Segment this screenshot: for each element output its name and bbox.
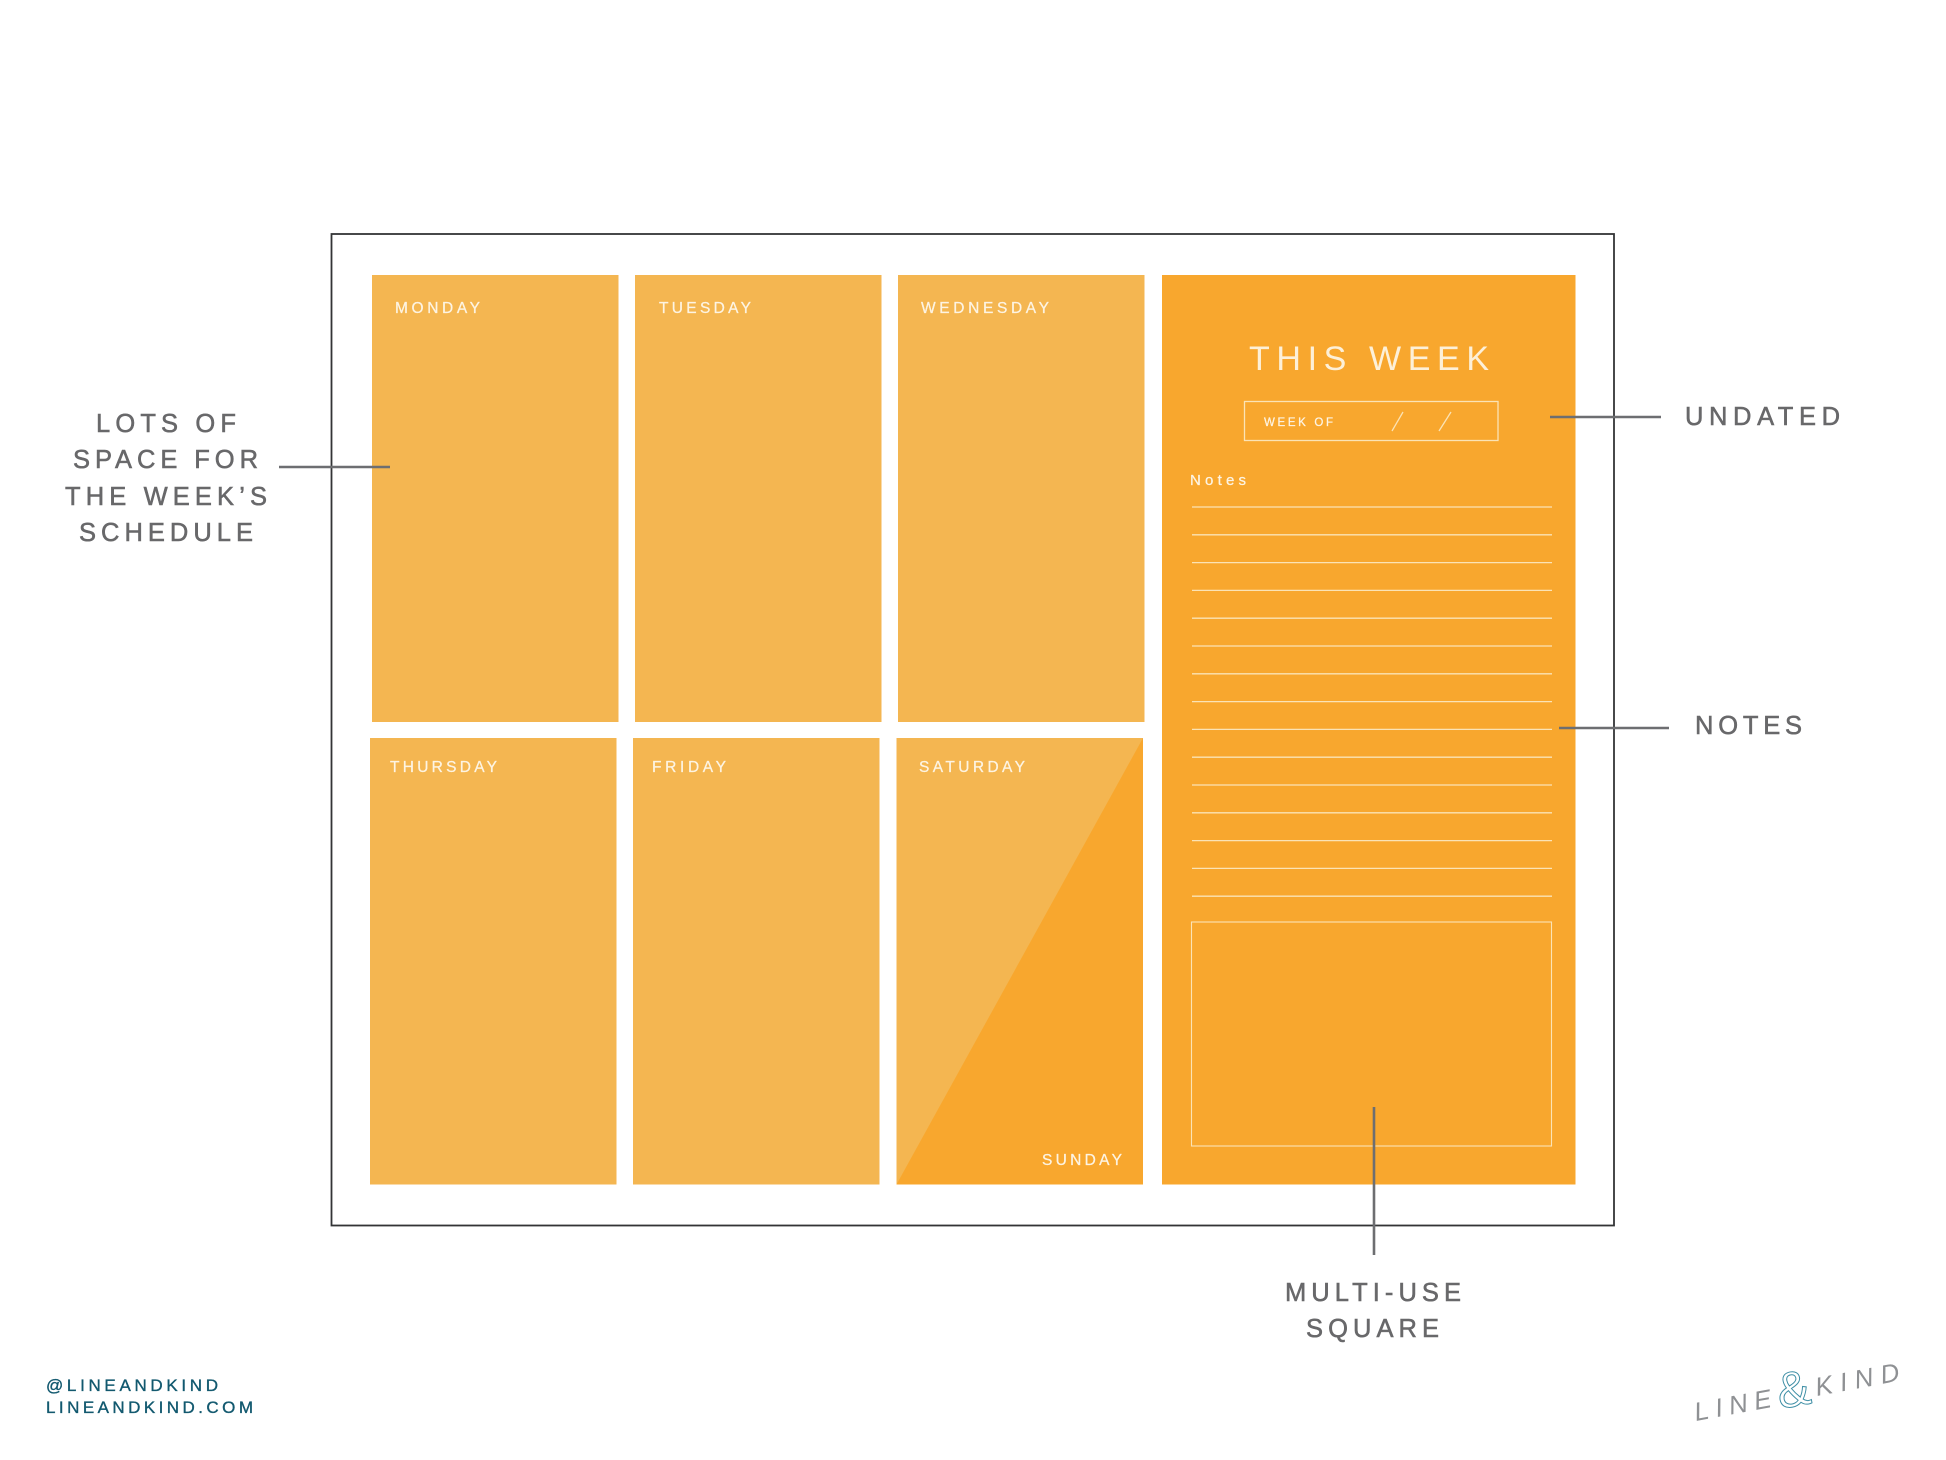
callout: multi-use square: SQUARE [1306, 1315, 1439, 1343]
footer: social handle and website: LINEANDKIND.COM [46, 1398, 253, 1417]
callout: notes: NOTES [1695, 712, 1802, 740]
panel: friday [633, 738, 880, 1184]
planner page frame [332, 234, 1614, 1226]
footer: social handle and website [46, 1376, 253, 1417]
panel: thursday: THURSDAY [390, 759, 497, 776]
panel: saturday and sunday: SUNDAY [1042, 1152, 1122, 1169]
callout: lots of space [65, 410, 390, 547]
panel: monday: MONDAY [395, 300, 480, 317]
panel: saturday and sunday [896, 738, 1143, 1184]
panel: friday: FRIDAY [652, 759, 726, 776]
week of date box: WEEK OF [1264, 417, 1333, 429]
panel: thursday [370, 738, 616, 1184]
callout: lots of space: SCHEDULE [79, 519, 253, 547]
callout: multi-use square [1285, 1107, 1461, 1343]
callout: lots of space: LOTS OF [96, 410, 236, 438]
callout: multi-use square: MULTI-USE [1285, 1279, 1461, 1307]
logo: line and kind: LINE [1692, 1383, 1774, 1427]
logo: line and kind: & [1772, 1359, 1815, 1420]
notes label: Notes [1190, 472, 1246, 489]
heading: this week: THIS WEEK [1249, 340, 1489, 378]
callout: lots of space: THE WEEK’S [65, 483, 267, 511]
panel: wednesday: WEDNESDAY [921, 300, 1049, 317]
panel: saturday and sunday: SATURDAY [919, 759, 1025, 776]
footer: social handle and website: @LINEANDKIND [46, 1376, 218, 1395]
panel: tuesday: TUESDAY [659, 300, 751, 317]
panel: this week sidebar [1162, 275, 1576, 1184]
notes ruled lines [1192, 507, 1552, 896]
panel: wednesday [898, 275, 1144, 722]
multi-use square box [1192, 922, 1552, 1146]
logo: line and kind [1692, 1357, 1902, 1427]
logo: line and kind: KIND [1813, 1357, 1902, 1402]
callout: undated: UNDATED [1685, 403, 1840, 431]
callout: lots of space: SPACE FOR [73, 446, 258, 474]
week of date box [1244, 402, 1498, 440]
panel: monday [372, 275, 618, 722]
panel: tuesday [635, 275, 882, 722]
